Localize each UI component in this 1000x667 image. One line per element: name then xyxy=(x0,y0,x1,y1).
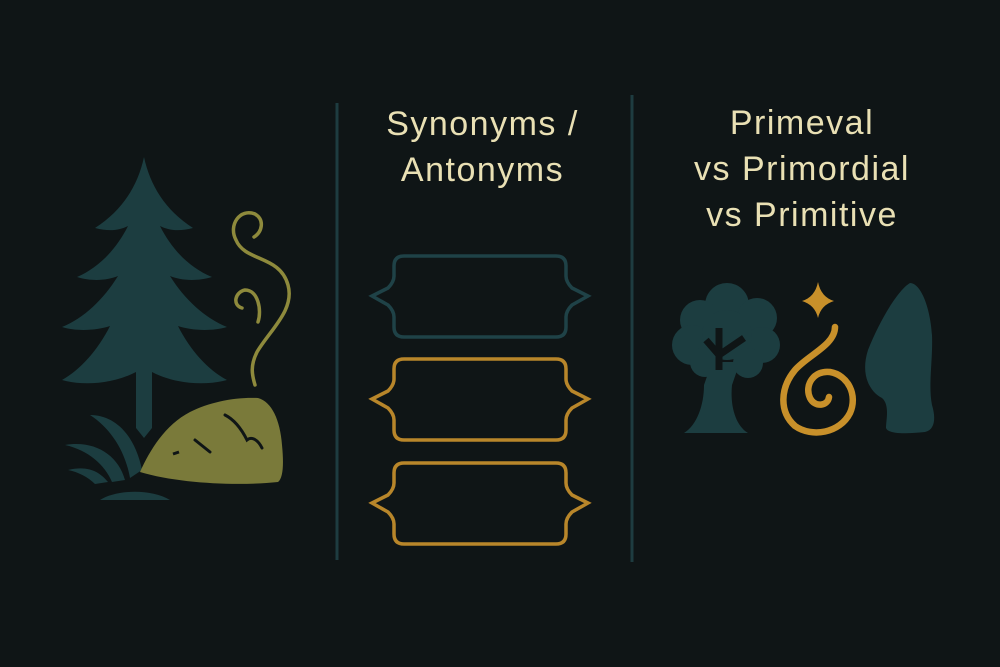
icon: grass xyxy=(65,415,170,500)
label box 1 xyxy=(372,256,588,337)
icon: star xyxy=(802,282,834,318)
icon: pine tree xyxy=(62,157,227,438)
heading: primeval vs primordial vs primitive: vs Primitive xyxy=(706,196,898,234)
heading: synonyms antonyms: Synonyms / xyxy=(386,105,579,143)
heading: primeval vs primordial vs primitive: vs Primordial xyxy=(694,150,910,188)
heading: primeval vs primordial vs primitive: Primeval xyxy=(730,104,874,142)
label box 3 xyxy=(372,463,588,544)
label box 2 xyxy=(372,359,588,440)
icon: spiral xyxy=(783,327,853,432)
icon: spearhead xyxy=(865,283,934,433)
icon: swirl wind xyxy=(233,213,289,385)
icon: deciduous tree xyxy=(672,283,780,433)
heading: primeval vs primordial vs primitive xyxy=(694,104,910,234)
heading: synonyms antonyms xyxy=(386,105,579,189)
heading: synonyms antonyms: Antonyms xyxy=(401,151,564,189)
icon: rock xyxy=(140,398,283,484)
